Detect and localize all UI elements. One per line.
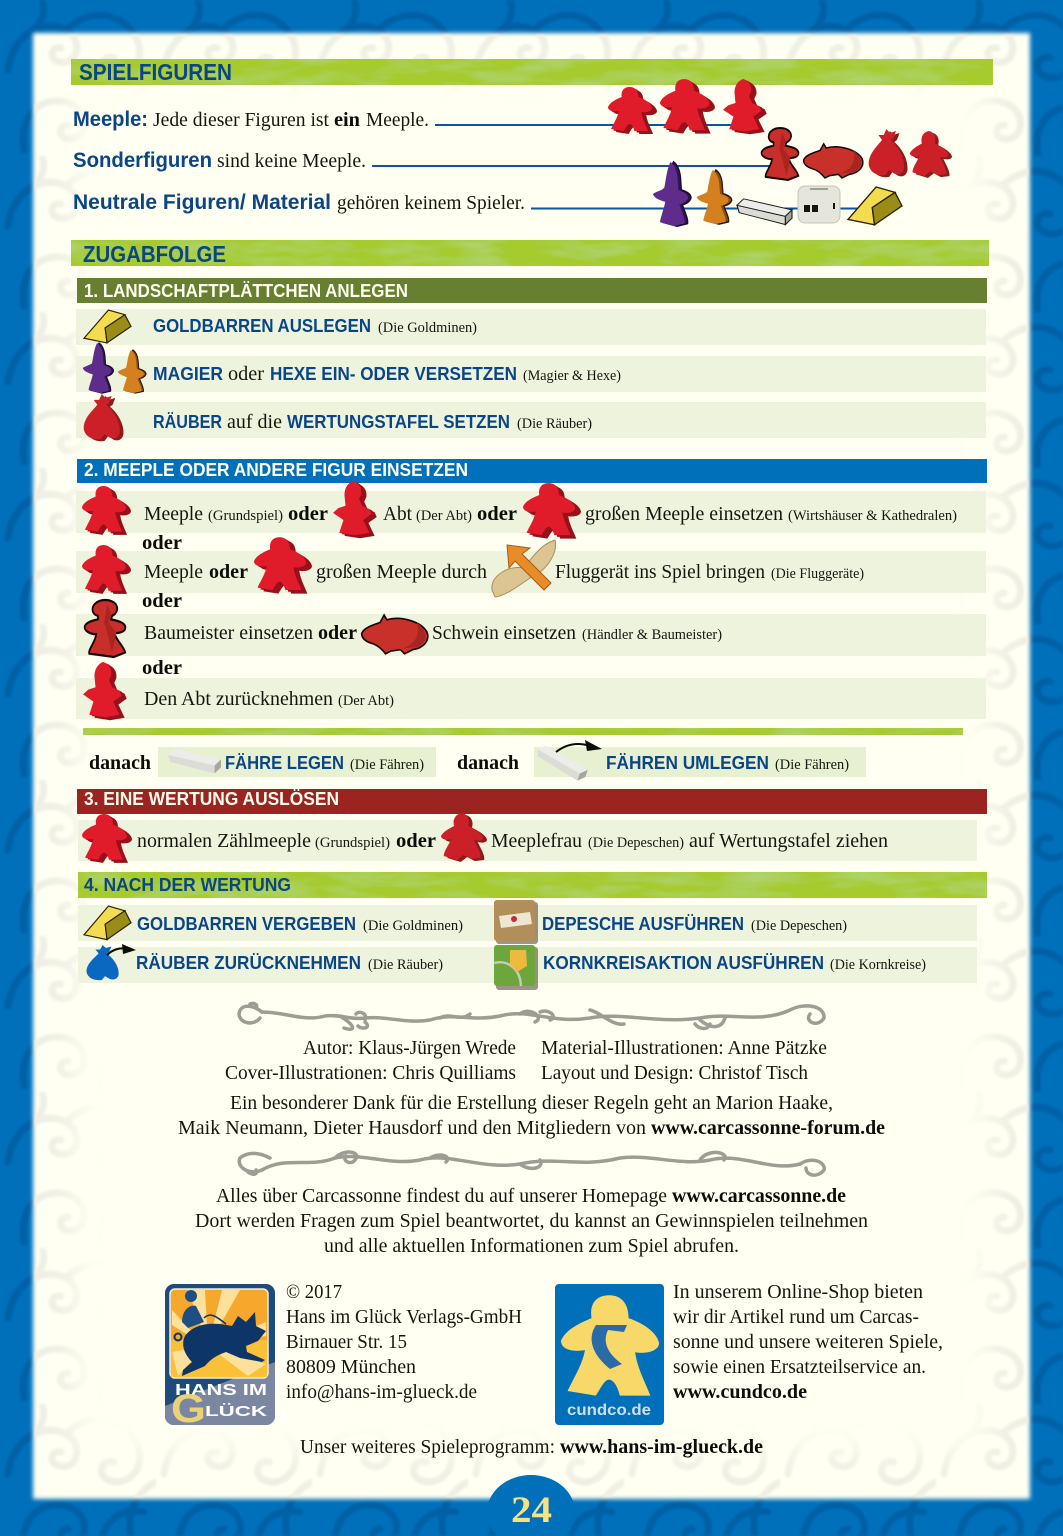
step 1 heading: 1. LANDSCHAFTPLÄTTCHEN ANLEGEN <box>84 281 408 301</box>
row: Räuber zurücknehmen, Kornkreisaktion: (Die Kornkreise) <box>830 957 926 973</box>
row: Goldbarren auslegen: (Die Goldminen) <box>378 320 477 336</box>
row: Meeple, Abt, großer Meeple: Abt <box>383 503 412 525</box>
row: Goldbarren vergeben, Depesche ausführen: (Die Depeschen) <box>751 918 847 934</box>
row: Goldbarren auslegen <box>76 309 986 345</box>
icons: special figures <box>762 128 952 180</box>
text: game program: Unser weiteres Spieleprogramm: <box>300 1436 555 1458</box>
row: Meeple, großer Meeple, Fluggerät: Fluggerät ins Spiel bringen <box>555 561 765 583</box>
row: Zählmeeple und Meeplefrau: (Grundspiel) <box>315 835 390 851</box>
ornament: divider 2 <box>239 1152 824 1175</box>
row: danach Fähren umlegen: danach <box>457 752 519 774</box>
heading: Zugabfolge <box>71 240 989 267</box>
row: Räuber auf die Wertungstafel: WERTUNGSTAFEL SETZEN <box>287 411 510 432</box>
text: Meeple definition: Meeple: <box>73 108 148 131</box>
text: oder: oder <box>142 657 182 679</box>
text: game program: www.hans-im-glueck.de <box>560 1436 763 1458</box>
row: Magier oder Hexe: HEXE EIN- ODER VERSETZEN <box>270 363 517 384</box>
text: online shop: wir dir Artikel rund um Carcas- <box>673 1306 919 1328</box>
row: Zählmeeple und Meeplefrau <box>78 813 977 863</box>
step 4 heading <box>78 872 987 898</box>
text: Meeple definition: ein <box>334 109 360 131</box>
page number <box>487 1475 575 1536</box>
row: Meeple, Abt, großer Meeple: oder <box>288 503 328 525</box>
row: Magier oder Hexe: oder <box>228 363 264 385</box>
row: danach Fähre legen: FÄHRE LEGEN <box>225 752 344 773</box>
text: Neutrale Figuren definition <box>73 191 525 214</box>
text: Meeple definition <box>73 108 429 131</box>
row: Meeple, großer Meeple, Fluggerät: großen Meeple durch <box>316 561 487 583</box>
text: publisher address <box>286 1281 522 1403</box>
row: Goldbarren vergeben, Depesche ausführen: DEPESCHE AUSFÜHREN <box>542 913 744 934</box>
icons: neutral figures and material <box>653 162 902 226</box>
panel: step 3 <box>77 789 987 863</box>
row: Räuber zurücknehmen, Kornkreisaktion: KORNKREISAKTION AUSFÜHREN <box>543 952 824 973</box>
row: Meeple, großer Meeple, Fluggerät <box>76 537 986 597</box>
text: credits: Material-Illustrationen: Anne Pätzke <box>541 1037 827 1059</box>
text: credits <box>178 1037 885 1139</box>
text: Neutrale Figuren definition: gehören keinem Spieler. <box>337 192 525 214</box>
icon: dispatch tile <box>494 900 538 944</box>
row: Räuber zurücknehmen, Kornkreisaktion: RÄUBER ZURÜCKNEHMEN <box>136 952 361 973</box>
text: publisher address: Hans im Glück Verlags-GmbH <box>286 1306 522 1328</box>
row: Magier oder Hexe <box>76 343 986 393</box>
text: publisher address: 80809 München <box>286 1356 416 1378</box>
text: publisher address: Birnauer Str. 15 <box>286 1331 407 1353</box>
text: online shop: In unserem Online-Shop bieten <box>673 1281 923 1303</box>
row: Räuber zurücknehmen, Kornkreisaktion: (Die Räuber) <box>368 957 443 973</box>
row: Goldbarren auslegen: GOLDBARREN AUSLEGEN <box>153 315 371 336</box>
logo: cundco: cundco.de <box>567 1402 651 1419</box>
panel: step 2 <box>76 459 987 783</box>
icon: crop circle tile <box>494 945 538 990</box>
row: Baumeister, Schwein: Baumeister einsetzen <box>144 622 313 644</box>
text: homepage information: Dort werden Fragen zum Spiel beantwortet, du kannst an Gewinnspielen teilnehmen <box>195 1210 868 1232</box>
heading: Zugabfolge: ZUGABFOLGE <box>83 241 226 267</box>
row: Räuber auf die Wertungstafel <box>76 394 986 441</box>
row: Baumeister, Schwein: oder <box>318 622 357 644</box>
row: danach Fähren umlegen: FÄHREN UMLEGEN <box>606 752 769 773</box>
step 3 heading <box>77 789 987 814</box>
row: Goldbarren vergeben, Depesche ausführen <box>78 900 977 944</box>
panel: step 4 <box>78 872 987 990</box>
row: Goldbarren vergeben, Depesche ausführen: GOLDBARREN VERGEBEN <box>137 913 356 934</box>
row: Meeple, Abt, großer Meeple: großen Meeple einsetzen <box>585 503 783 525</box>
row: Räuber auf die Wertungstafel: (Die Räuber) <box>517 416 592 432</box>
row: Räuber zurücknehmen, Kornkreisaktion <box>78 944 977 990</box>
row: Abt zurücknehmen <box>76 662 986 720</box>
row: danach Fähren umlegen: (Die Fähren) <box>775 757 849 773</box>
row: Zählmeeple und Meeplefrau: normalen Zählmeeple <box>137 830 311 852</box>
heading: Spielfiguren: SPIELFIGUREN <box>79 59 232 85</box>
row: Zählmeeple und Meeplefrau: (Die Depeschen) <box>588 835 684 851</box>
row: Abt zurücknehmen: Den Abt zurücknehmen <box>144 688 333 710</box>
text: Sonderfiguren definition <box>73 149 366 172</box>
row: Räuber auf die Wertungstafel: RÄUBER <box>153 411 222 432</box>
row: Meeple, großer Meeple, Fluggerät: oder <box>209 561 248 583</box>
icon: flying machine <box>492 540 556 597</box>
text: Meeple definition: Jede dieser Figuren ist <box>153 109 329 131</box>
logo: Hans im Glück: HANS IM <box>175 1382 267 1399</box>
text: Sonderfiguren definition: sind keine Meeple. <box>217 150 366 172</box>
text: credits: Layout und Design: Christof Tisch <box>541 1062 808 1084</box>
row: Baumeister, Schwein: Schwein einsetzen <box>432 622 576 644</box>
text: game program <box>300 1436 763 1458</box>
text: credits: Maik Neumann, Dieter Hausdorf und den Mitgliedern von <box>178 1117 646 1139</box>
text: Meeple definition: Meeple. <box>366 109 429 131</box>
logo: Hans im Glück: LÜCK <box>205 1403 267 1420</box>
row: Goldbarren vergeben, Depesche ausführen: (Die Goldminen) <box>363 918 463 934</box>
logo: Hans im Glück <box>165 1284 275 1431</box>
text: Sonderfiguren definition: Sonderfiguren <box>73 149 212 172</box>
row: Zählmeeple und Meeplefrau: auf Wertungstafel ziehen <box>689 830 888 852</box>
text: online shop: sowie einen Ersatzteilservice an. <box>673 1356 926 1378</box>
row: Meeple, Abt, großer Meeple: (Wirtshäuser & Kathedralen) <box>788 508 957 524</box>
heading: Spielfiguren <box>71 59 993 85</box>
text: credits: Ein besonderer Dank für die Erstellung dieser Regeln geht an Marion Haake, <box>230 1092 833 1114</box>
row: danach Fähren umlegen <box>457 740 866 783</box>
row: danach Fähre legen: danach <box>89 752 151 774</box>
text: homepage information: Alles über Carcassonne findest du auf unserer Homepage <box>216 1185 667 1207</box>
logo: cundco <box>555 1284 664 1425</box>
text: publisher address: © 2017 <box>286 1281 342 1303</box>
panel: step 1 <box>76 278 987 441</box>
text: oder: oder <box>142 590 182 612</box>
row: Meeple, Abt, großer Meeple: (Grundspiel) <box>208 508 283 524</box>
text: homepage information: www.carcassonne.de <box>672 1185 846 1207</box>
row: Meeple, großer Meeple, Fluggerät: Meeple <box>144 561 203 583</box>
panel: figure categories <box>73 79 952 226</box>
text: Neutrale Figuren definition: Neutrale Figuren/ Material <box>73 191 331 214</box>
row: Zählmeeple und Meeplefrau: oder <box>396 830 436 852</box>
step 2 heading: 2. MEEPLE ODER ANDERE FIGUR EINSETZEN <box>84 460 468 480</box>
logo: Hans im Glück: G <box>171 1387 206 1431</box>
text: homepage information: und alle aktuellen Informationen zum Spiel abrufen. <box>324 1235 739 1257</box>
text: publisher address: info@hans-im-glueck.de <box>286 1381 477 1403</box>
row: Meeple, Abt, großer Meeple: oder <box>477 503 517 525</box>
text: credits: Cover-Illustrationen: Chris Quilliams <box>225 1062 516 1084</box>
row: Baumeister, Schwein: (Händler & Baumeister) <box>582 627 722 643</box>
step 4 heading: 4. NACH DER WERTUNG <box>84 874 291 895</box>
row: Magier oder Hexe: (Magier & Hexe) <box>523 368 621 384</box>
row: Räuber auf die Wertungstafel: auf die <box>227 411 282 433</box>
row: Meeple, Abt, großer Meeple: (Der Abt) <box>416 508 472 524</box>
text: homepage information <box>195 1185 868 1257</box>
text: online shop: www.cundco.de <box>673 1381 807 1403</box>
row: Meeple, großer Meeple, Fluggerät: (Die Fluggeräte) <box>771 566 864 582</box>
row: danach Fähre legen: (Die Fähren) <box>350 757 424 773</box>
step 2 heading <box>77 459 987 483</box>
text: credits: Autor: Klaus-Jürgen Wrede <box>303 1037 516 1059</box>
row: Magier oder Hexe: MAGIER <box>153 363 223 384</box>
text: oder: oder <box>142 532 182 554</box>
icons: red meeples <box>608 79 767 134</box>
row: Meeple, Abt, großer Meeple: Meeple <box>144 503 203 525</box>
text: credits: www.carcassonne-forum.de <box>651 1117 885 1139</box>
page number: 24 <box>511 1490 552 1531</box>
row: danach Fähre legen <box>89 747 436 777</box>
step 3 heading: 3. EINE WERTUNG AUSLÖSEN <box>84 789 339 809</box>
text: online shop <box>673 1281 943 1403</box>
text: online shop: sonne und unsere weiteren Spiele, <box>673 1331 943 1353</box>
row: Meeple, Abt, großer Meeple <box>76 481 986 539</box>
connector lines <box>372 125 860 208</box>
row: Baumeister, Schwein <box>76 600 986 657</box>
step 1 heading <box>77 278 987 303</box>
ornament: divider 1 <box>239 1003 824 1029</box>
row: Abt zurücknehmen: (Der Abt) <box>338 693 394 709</box>
row: Zählmeeple und Meeplefrau: Meeplefrau <box>491 830 582 852</box>
